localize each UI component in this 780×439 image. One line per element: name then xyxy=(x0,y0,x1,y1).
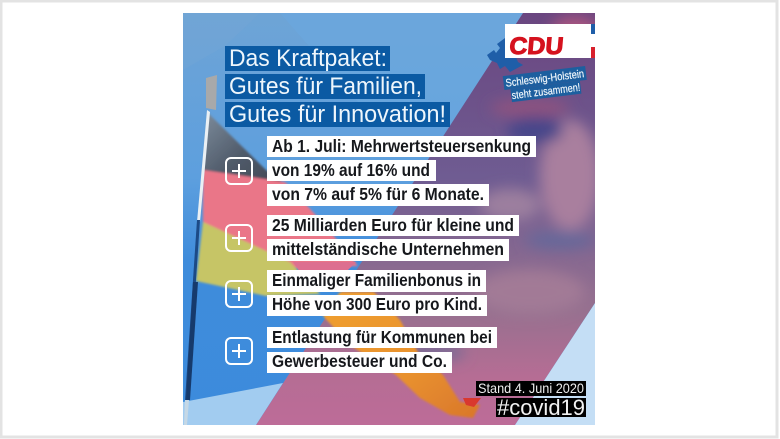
hashtag: #covid19 xyxy=(497,395,585,420)
item 2: Unternehmen: 25 Milliarden Euro für kleine und xyxy=(272,215,514,235)
icon: blue puzzle piece xyxy=(487,38,523,72)
item 1: Mehrwertsteuersenkung: Ab 1. Juli: Mehrwertsteuersenkung xyxy=(272,136,531,156)
item 3: Familienbonus: Höhe von 300 Euro pro Kind. xyxy=(272,294,482,314)
title: Gutes für Familien, xyxy=(229,73,422,100)
icon: plus xyxy=(226,225,252,251)
item 3: Familienbonus xyxy=(226,270,487,316)
item 4: Kommunen xyxy=(226,327,497,373)
logo: CDU xyxy=(487,24,595,72)
title: Gutes für Innovation! xyxy=(229,101,446,128)
title: Das Kraftpaket: xyxy=(229,45,387,72)
icon: plus xyxy=(226,158,252,184)
flag xyxy=(196,113,358,296)
background photo panel xyxy=(183,13,600,425)
flag pole xyxy=(184,75,217,425)
icon: plus xyxy=(226,338,252,364)
tag: Schleswig-Holstein steht zusammen: Schleswig-Holstein xyxy=(505,68,585,90)
tag: Schleswig-Holstein steht zusammen xyxy=(503,66,588,103)
purple band xyxy=(256,13,595,425)
item 3: Familienbonus: Einmaliger Familienbonus in xyxy=(272,270,481,290)
item 1: Mehrwertsteuersenkung xyxy=(226,136,536,206)
item 4: Kommunen: Entlastung für Kommunen bei xyxy=(272,327,492,347)
lower right light triangle xyxy=(515,303,595,425)
clouds xyxy=(415,13,595,366)
date label: Stand 4. Juni 2020 xyxy=(478,380,584,396)
title xyxy=(225,45,450,128)
item 4: Kommunen: Gewerbesteuer und Co. xyxy=(272,351,447,371)
item 2: Unternehmen: mittelständische Unternehmen xyxy=(272,239,504,259)
lower left light triangle xyxy=(183,383,283,425)
icon: plus xyxy=(226,281,252,307)
item 2: Unternehmen xyxy=(226,215,519,261)
item 1: Mehrwertsteuersenkung: von 19% auf 16% und xyxy=(272,160,430,180)
flag folds over band xyxy=(293,262,356,270)
item 1: Mehrwertsteuersenkung: von 7% auf 5% für 6 Monate. xyxy=(272,184,484,204)
orange flag tail xyxy=(323,292,480,418)
logo: CDU: CDU xyxy=(508,33,565,60)
tag: Schleswig-Holstein steht zusammen: steht zusammen! xyxy=(511,82,581,102)
